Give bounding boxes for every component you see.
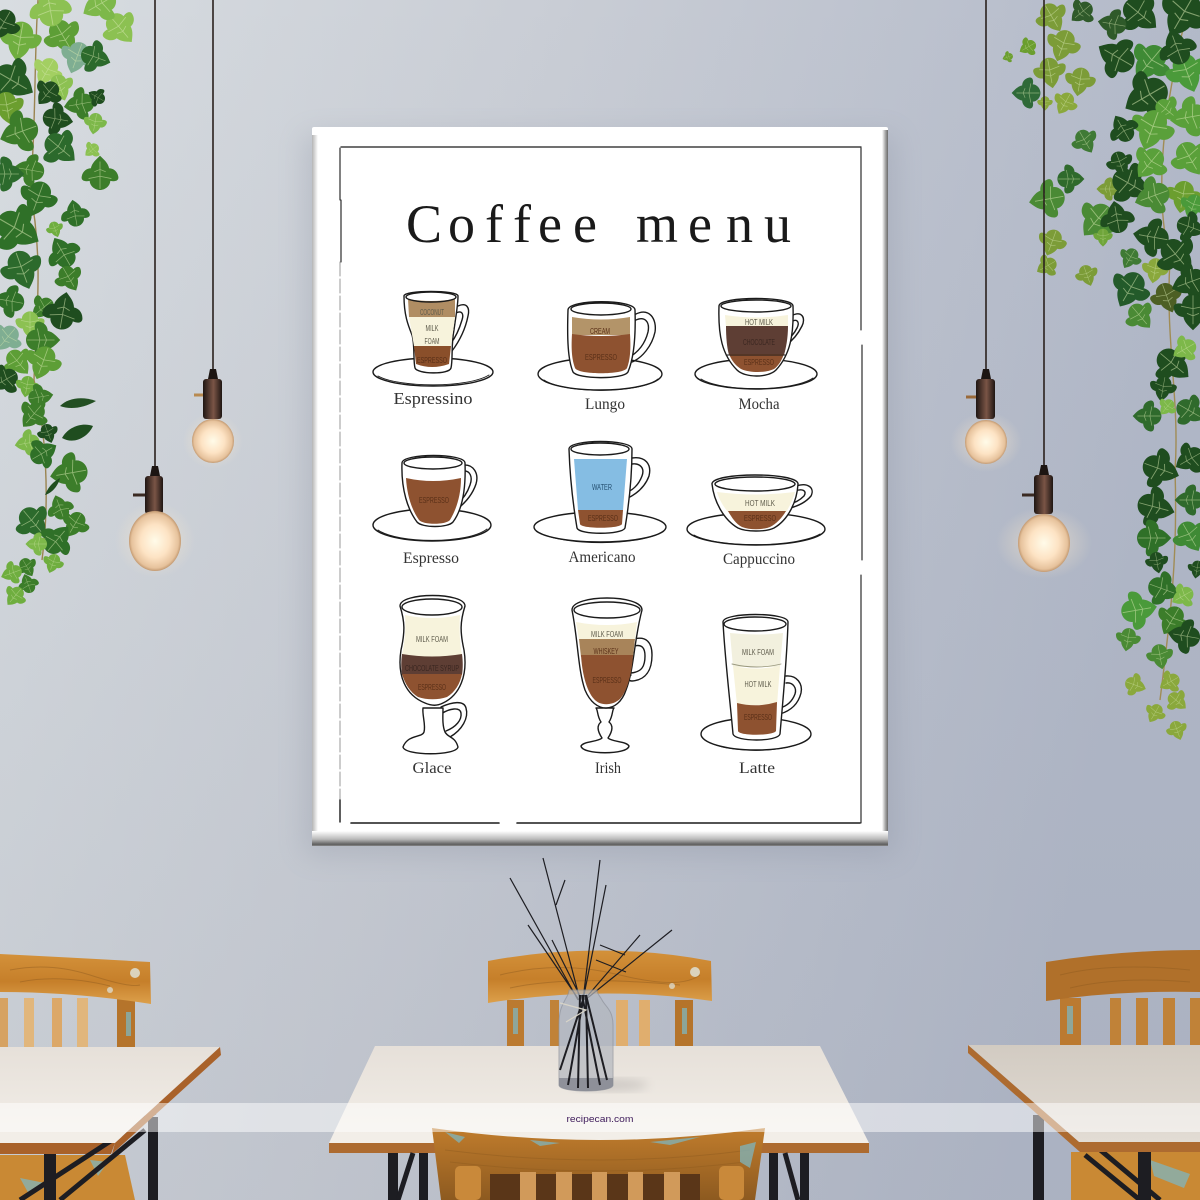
cup: Mocha: CHOCOLATE <box>743 337 775 347</box>
chair back: right <box>1046 950 1200 1048</box>
pendant lamp: left long <box>115 0 195 578</box>
table: left <box>0 1047 221 1200</box>
cup: Latte: Latte <box>739 760 775 777</box>
cup: Mocha <box>695 298 817 413</box>
cup: Espressino: MILK <box>426 323 439 333</box>
poster shadow <box>305 135 895 855</box>
cup: Americano: WATER <box>592 482 612 492</box>
cup: Espressino: COCONUT <box>420 307 444 317</box>
cup: Latte: MILK FOAM <box>742 647 774 657</box>
cup: Espresso: Espresso <box>403 550 459 567</box>
pendant lamp: right long <box>996 0 1092 579</box>
cup: Glace: Glace <box>412 760 452 777</box>
title: Coffeemenu <box>406 194 791 254</box>
cup: Lungo <box>538 302 662 413</box>
cup: Americano: Americano <box>568 549 636 566</box>
cup: Mocha: HOT MILK <box>745 317 773 327</box>
cup: Espresso: ESPRESSO <box>419 495 449 505</box>
vase with twigs <box>510 858 672 1091</box>
ivy plant: left <box>0 0 146 612</box>
pendant lamp: right short <box>950 0 1022 472</box>
cup: Glace: ESPRESSO <box>418 682 446 692</box>
table: centre <box>329 1046 869 1200</box>
cup: Espressino <box>373 292 493 408</box>
hand drawn border <box>340 147 862 823</box>
cup: Mocha: Mocha <box>738 396 780 413</box>
cup: Mocha: ESPRESSO <box>744 357 774 367</box>
cup: Cappuccino: HOT MILK <box>745 498 775 508</box>
chair: foreground <box>432 1128 765 1200</box>
cup: Latte <box>701 614 811 777</box>
cup: Glace: CHOCOLATE SYRUP <box>405 663 459 673</box>
cup: Americano: ESPRESSO <box>588 513 618 523</box>
cup: Cappuccino: ESPRESSO <box>744 513 776 523</box>
cup: Espressino: FOAM <box>424 336 440 346</box>
cup: Latte: HOT MILK <box>744 679 772 689</box>
watermark text: recipecan.com <box>566 1114 634 1125</box>
watermark band <box>0 1103 1200 1132</box>
ivy plant: right <box>1001 0 1200 744</box>
cup: Espressino: Espressino <box>394 389 472 408</box>
chair back: left <box>0 954 151 1050</box>
cup: Lungo: Lungo <box>585 396 625 413</box>
table: right <box>968 1045 1200 1200</box>
cup: Cappuccino <box>687 475 825 568</box>
cup: Lungo: ESPRESSO <box>585 352 617 362</box>
cup: Irish: ESPRESSO <box>592 675 622 685</box>
chair back: centre <box>488 950 712 1048</box>
cup: Glace: MILK FOAM <box>416 634 448 644</box>
cup: Cappuccino: Cappuccino <box>723 551 795 568</box>
cup: Espressino: ESPRESSO <box>417 355 447 365</box>
cup: Lungo: CREAM <box>590 326 610 336</box>
cup: Americano <box>534 442 666 566</box>
cup: Irish <box>572 598 652 777</box>
cup: Glace <box>400 596 467 777</box>
cup: Irish: WHISKEY <box>594 646 619 656</box>
pendant lamp: left short <box>183 0 243 469</box>
cup: Latte: ESPRESSO <box>744 712 772 722</box>
cup: Irish: MILK FOAM <box>591 629 623 639</box>
cup: Irish: Irish <box>595 760 621 777</box>
cup: Espresso <box>373 456 491 567</box>
poster: coffee menu <box>312 127 888 846</box>
